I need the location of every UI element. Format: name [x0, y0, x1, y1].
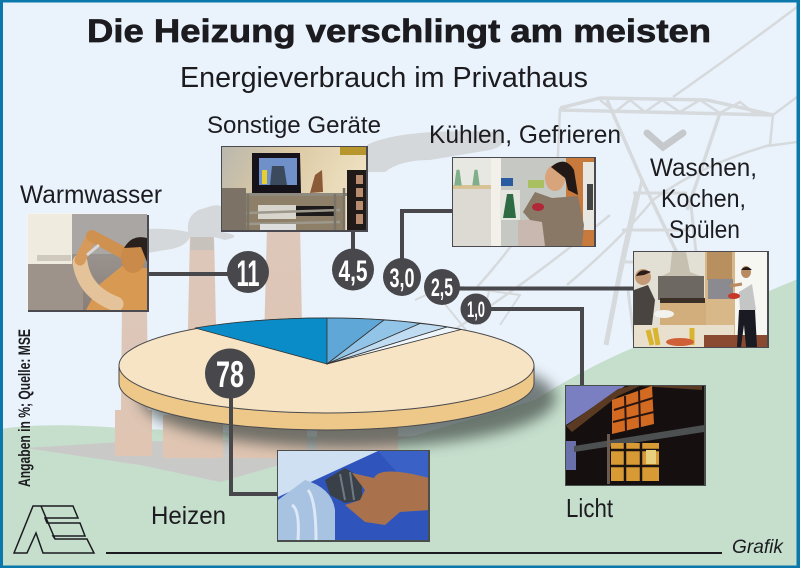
value bubble: 3,0: 3,0 — [390, 263, 414, 293]
value bubble: 2,5 — [424, 269, 460, 305]
photo: Heizen — [277, 450, 430, 542]
label: Waschen, Kochen, Spülen: Kochen, — [661, 185, 746, 213]
photo: Kühlen, Gefrieren — [452, 157, 596, 247]
photo: Warmwasser — [27, 213, 149, 312]
background: ground shadow — [25, 436, 420, 482]
value bubble: 78: 78 — [216, 354, 244, 395]
segment: Licht 1,0 — [327, 327, 461, 364]
footer rule — [106, 552, 722, 554]
source note: Angaben in %; Quelle: MSE — [15, 329, 34, 487]
photo: Licht — [565, 385, 706, 486]
segment: Kühlen 3,0 — [327, 320, 420, 364]
pie side — [119, 366, 534, 430]
label: Warmwasser: Warmwasser — [20, 181, 162, 209]
background: power pylon — [415, 7, 797, 345]
value bubble: 78 — [205, 348, 255, 398]
value bubble: 11: 11 — [236, 253, 260, 294]
value bubble: 1,0: 1,0 — [467, 297, 485, 322]
pie shadow — [140, 348, 556, 448]
segment: Waschen 2,5 — [327, 324, 447, 364]
background: insulator — [647, 133, 683, 147]
title: Die Heizung verschlingt am meisten — [87, 13, 711, 49]
segment: Warmwasser 11 — [195, 318, 327, 364]
label: Waschen, Kochen, Spülen — [650, 154, 757, 244]
value bubble: 4,5: 4,5 — [338, 255, 368, 288]
background: chimneys — [115, 225, 398, 461]
value bubble: 11 — [227, 251, 269, 294]
logo — [14, 506, 94, 553]
label: Kühlen, Gefrieren: Kühlen, Gefrieren — [429, 121, 621, 149]
label: Sonstige Geräte: Sonstige Geräte — [207, 112, 381, 139]
segment: Sonstige 4,5 — [327, 318, 384, 364]
background: ground — [0, 278, 800, 568]
photo: Sonstige Geräte — [221, 146, 382, 232]
label: Heizen: Heizen — [151, 502, 226, 530]
credit: Grafik: Grafik — [732, 537, 784, 558]
value bubble: 3,0 — [383, 258, 421, 296]
background: chimney cap — [190, 232, 214, 250]
pie chart — [119, 318, 556, 448]
label: Licht: Licht — [566, 493, 614, 523]
value bubble: 4,5 — [332, 248, 374, 290]
value bubble: 1,0 — [460, 294, 492, 324]
value bubble: 2,5: 2,5 — [431, 274, 453, 302]
connector lines — [147, 211, 634, 494]
background: smoke clouds — [148, 131, 503, 253]
subtitle: Energieverbrauch im Privathaus — [180, 62, 588, 94]
label: Waschen, Kochen, Spülen: Spülen — [669, 216, 740, 244]
label: Waschen, Kochen, Spülen: Waschen, — [650, 154, 757, 182]
photo: Waschen, Kochen, Spülen — [633, 251, 769, 348]
segment: Heizen 78 — [119, 318, 534, 413]
